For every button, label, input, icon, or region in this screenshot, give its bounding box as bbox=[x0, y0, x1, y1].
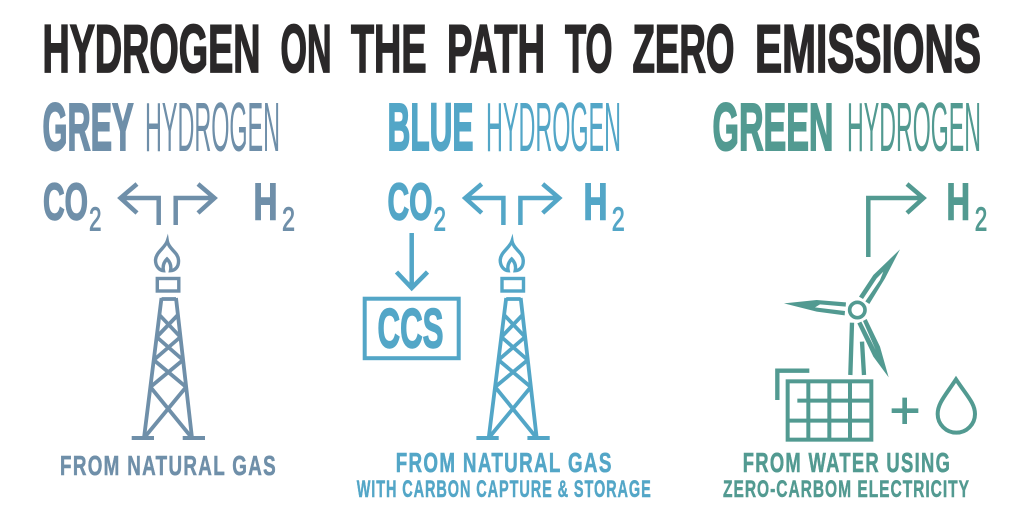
box: CCS: CCS bbox=[378, 296, 444, 359]
heading: blue hydrogen: BLUE bbox=[388, 90, 474, 165]
arrows: split left and right bbox=[120, 184, 215, 225]
title: TO bbox=[565, 11, 612, 87]
arrow: up and right to H2 bbox=[868, 184, 924, 257]
caption: from natural gas: FROM NATURAL GAS bbox=[60, 450, 277, 481]
title: ON bbox=[280, 11, 332, 87]
label: H2: H bbox=[584, 174, 608, 232]
label: H2: 2 bbox=[612, 200, 625, 238]
icon: wind turbine bbox=[784, 249, 900, 377]
icon: gas flare tower bbox=[476, 241, 550, 438]
text: HYDROGEN bbox=[486, 88, 621, 166]
label: CO2: 2 bbox=[434, 200, 446, 238]
label: CO2 bbox=[388, 174, 446, 238]
icon: water drop bbox=[938, 379, 975, 433]
arrows: split left and right bbox=[465, 184, 560, 225]
title bbox=[42, 11, 981, 87]
label: CO2: 2 bbox=[89, 200, 102, 238]
panel: green hydrogen bbox=[712, 88, 987, 503]
title: PATH bbox=[447, 11, 545, 87]
caption: from natural gas with carbon capture and storage: WITH CARBON CAPTURE & STORAGE bbox=[357, 476, 652, 503]
box: CCS bbox=[365, 296, 459, 359]
heading: grey hydrogen: GREY bbox=[42, 90, 134, 165]
label: H2: 2 bbox=[975, 200, 987, 238]
icon: gas flare tower bbox=[132, 241, 205, 438]
icon: plus bbox=[892, 398, 918, 424]
caption: from natural gas with carbon capture and storage: FROM NATURAL GAS bbox=[396, 447, 613, 478]
label: H2: H bbox=[254, 174, 278, 232]
title: THE bbox=[351, 11, 426, 87]
label: CO2: CO bbox=[388, 174, 432, 232]
caption: from water using zero-carbom electricity bbox=[723, 447, 970, 503]
arrow: CO2 down to CCS bbox=[396, 233, 428, 288]
panel: blue hydrogen bbox=[357, 88, 652, 503]
heading: green hydrogen: GREEN bbox=[712, 90, 834, 165]
panel: grey hydrogen bbox=[42, 88, 295, 481]
label: H2: 2 bbox=[282, 200, 295, 238]
label: H2: H bbox=[946, 174, 970, 232]
icon: solar panel bbox=[777, 371, 871, 440]
title: HYDROGEN bbox=[42, 11, 260, 87]
label: CO2 bbox=[43, 174, 102, 238]
caption: from natural gas with carbon capture and storage bbox=[357, 447, 652, 503]
label: CO2: CO bbox=[43, 174, 88, 232]
text: HYDROGEN bbox=[145, 88, 280, 166]
title: ZERO bbox=[632, 11, 734, 87]
